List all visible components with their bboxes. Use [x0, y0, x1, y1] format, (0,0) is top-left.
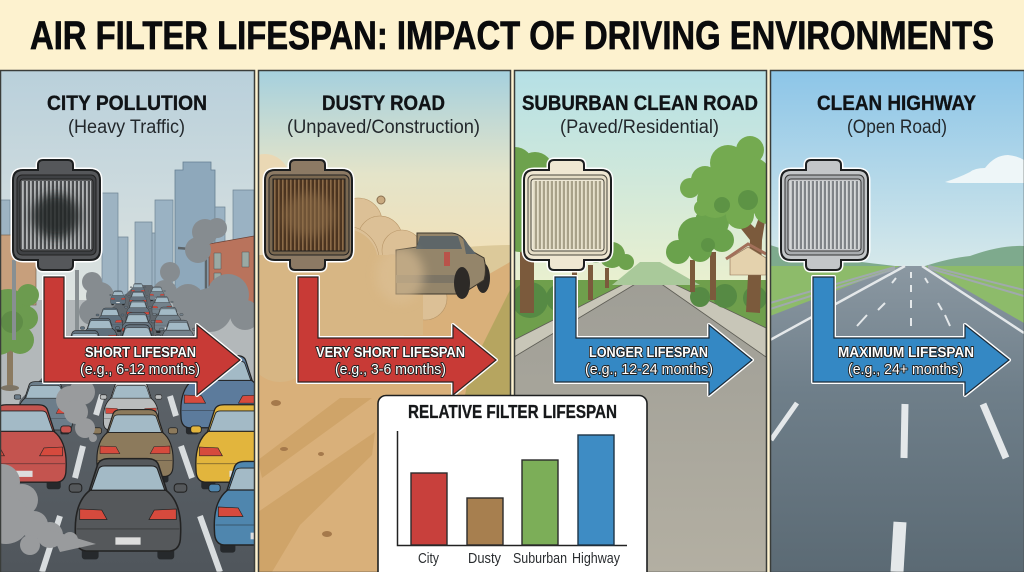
streetlamp: [178, 246, 208, 289]
panel: suburban clean road: [514, 70, 768, 572]
road: [0, 285, 254, 572]
arrow: maximum lifespan: [813, 277, 1009, 395]
arrow: short lifespan: [44, 277, 240, 395]
hedges: [512, 282, 767, 318]
heading: city pollution: [47, 92, 207, 138]
arrow: very short lifespan: [298, 277, 496, 395]
heading: city pollution: CITY POLLUTION: [47, 92, 207, 115]
arrow: very short lifespan: (e.g., 3-6 months): [335, 361, 446, 378]
icon: dusty air filter: [265, 160, 352, 270]
heading: clean highway: (Open Road): [847, 117, 947, 138]
heading: clean highway: [817, 92, 976, 138]
tire tracks: [258, 398, 375, 572]
arrow: very short lifespan: VERY SHORT LIFESPAN: [316, 344, 465, 361]
heading: city pollution: (Heavy Traffic): [68, 117, 185, 138]
road: [770, 266, 1024, 572]
panel: city pollution: [0, 70, 256, 572]
axis labels: Suburban: [513, 551, 567, 567]
bar: suburban: [522, 460, 558, 545]
arrow: maximum lifespan: (e.g., 24+ months): [848, 361, 963, 378]
arrow: short lifespan: (e.g., 6-12 months): [80, 361, 200, 378]
bar: city: [411, 473, 447, 545]
lane markings: [42, 395, 220, 572]
heading: suburban clean road: [522, 92, 758, 138]
heading: suburban clean road: SUBURBAN CLEAN ROAD: [522, 92, 758, 115]
heading: dusty road: (Unpaved/Construction): [287, 117, 480, 138]
axis labels: [418, 551, 621, 567]
pale far dust: [259, 154, 286, 255]
arrow: longer lifespan: (e.g., 12-24 months): [585, 361, 713, 378]
smoke: [79, 218, 260, 341]
axis labels: City: [418, 551, 440, 567]
heading: clean highway: CLEAN HIGHWAY: [817, 92, 976, 115]
arrow: longer lifespan: [555, 277, 752, 395]
house: [730, 247, 766, 275]
exhaust smoke: [0, 379, 97, 555]
panel: relative filter lifespan chart: [378, 396, 647, 572]
icon: clean suburban air filter: [524, 160, 611, 270]
lane markings: [770, 266, 1024, 572]
dust cloud: [354, 198, 448, 320]
cars: [1, 355, 254, 560]
heading: suburban clean road: (Paved/Residential): [560, 117, 719, 138]
bar: highway: [578, 435, 614, 545]
icon: dirty city air filter: [13, 160, 100, 270]
grass: [465, 290, 510, 395]
hills: [771, 245, 1024, 266]
bar chart axes: [398, 431, 627, 546]
cloud: [945, 155, 1024, 183]
axis labels: Dusty: [468, 551, 502, 567]
icon: clean highway air filter: [781, 160, 868, 270]
building left: [0, 235, 36, 305]
arrow: short lifespan: SHORT LIFESPAN: [85, 344, 196, 361]
chart title: RELATIVE FILTER LIFESPAN: [408, 402, 617, 422]
axis labels: Highway: [572, 551, 621, 567]
road: [514, 283, 766, 572]
bar: dusty: [467, 498, 503, 545]
panel: clean highway: [770, 70, 1024, 572]
heading: dusty road: [287, 92, 480, 138]
trees: [0, 284, 39, 391]
panel: dusty road: [241, 70, 510, 572]
arrow: maximum lifespan: MAXIMUM LIFESPAN: [838, 344, 974, 361]
building right: [208, 236, 254, 303]
distant foliage: [612, 262, 700, 285]
traffic queue: [70, 283, 195, 336]
trees: [515, 136, 766, 313]
guardrails: [770, 266, 1024, 309]
truck: [376, 233, 490, 303]
arrow: longer lifespan: LONGER LIFESPAN: [589, 344, 708, 361]
heading: dusty road: DUSTY ROAD: [322, 92, 445, 115]
